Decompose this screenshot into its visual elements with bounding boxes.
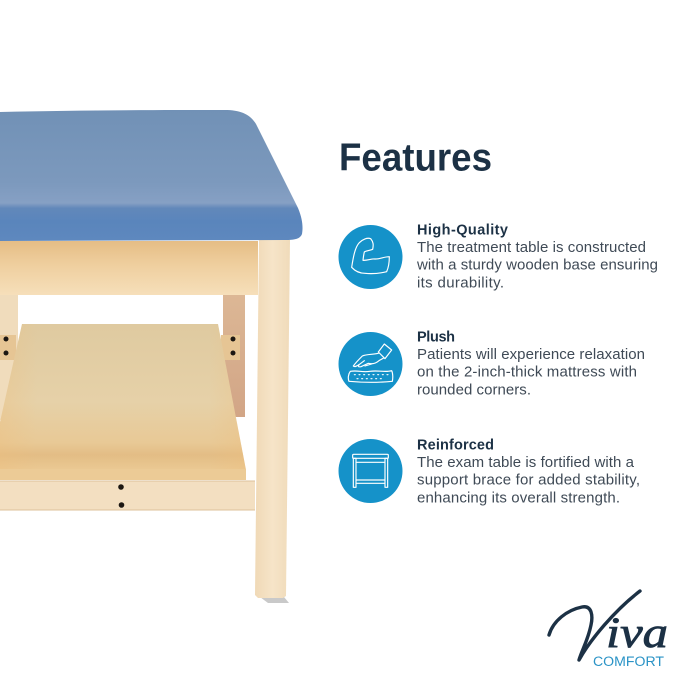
feature: reinforced [338, 438, 640, 506]
product photo: treatment table [0, 110, 303, 603]
description: on the 2-inch-thick mattress with [417, 364, 637, 381]
description: enhancing its overall strength. [417, 489, 620, 506]
heading: Reinforced [417, 438, 494, 454]
back right leg [223, 295, 245, 417]
description: The treatment table is constructed [417, 239, 646, 256]
left bracket [0, 335, 16, 360]
leg shadow [260, 597, 289, 603]
heading: Plush [417, 330, 455, 346]
back left leg [0, 295, 18, 420]
shelf side shading [0, 324, 246, 470]
title: Features [339, 136, 492, 180]
icon: hand pressing mattress [338, 332, 402, 396]
blue cushioned top [0, 110, 303, 241]
description: its durability. [417, 274, 504, 291]
description: support brace for added stability, [417, 472, 640, 489]
description: Patients will experience relaxation [417, 346, 645, 363]
logo script letters: iva [606, 610, 668, 657]
icon: flexed arm [338, 225, 402, 289]
front leg [255, 240, 290, 598]
lower shelf [0, 324, 246, 480]
logo: Viva Comfort [549, 591, 668, 669]
description [417, 454, 640, 506]
lower support rail [0, 480, 255, 510]
description [416, 239, 658, 291]
heading: High-Quality [417, 222, 508, 238]
description [417, 346, 645, 398]
description: rounded corners. [417, 381, 531, 398]
logo subtitle: COMFORT [593, 654, 664, 669]
shelf front edge [0, 469, 246, 480]
wooden apron [0, 241, 258, 295]
feature: high-quality [338, 222, 658, 291]
right bracket [221, 335, 240, 360]
description: with a sturdy wooden base ensuring [416, 257, 658, 274]
feature: plush [338, 330, 645, 398]
logo swash [549, 591, 640, 660]
icon: exam table [338, 439, 402, 503]
description: The exam table is fortified with a [417, 454, 635, 471]
